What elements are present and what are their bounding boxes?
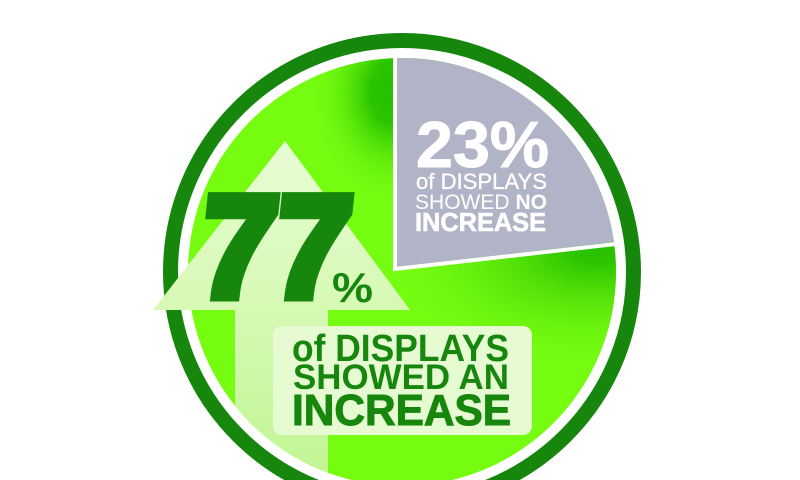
- grey slice label: 23 percent of displays showed no increase: 23%: [416, 108, 549, 181]
- callout: of displays showed an increase: of DISPLAYS: [292, 328, 509, 370]
- pie chart infographic: [153, 33, 641, 480]
- grey slice label: 23 percent of displays showed no increase: [415, 108, 549, 237]
- big value: 77 percent: %: [332, 264, 373, 311]
- pie slice: 77 percent green: [180, 50, 630, 480]
- big value: 77 percent: 77: [193, 167, 358, 327]
- grey slice label: 23 percent of displays showed no increase: INCREASE: [415, 207, 546, 237]
- grey slice label: 23 percent of displays showed no increase: SHOWED NO: [415, 191, 547, 214]
- callout: of displays showed an increase: INCREASE: [292, 386, 511, 435]
- pie slice: 23 percent grey: [395, 50, 625, 269]
- grey slice label: 23 percent of displays showed no increase: of DISPLAYS: [416, 169, 547, 194]
- arrow pointing up: [153, 141, 410, 480]
- outer green ring: [170, 40, 634, 480]
- callout: of displays showed an increase: SHOWED AN: [293, 358, 509, 397]
- callout: of displays showed an increase: [273, 326, 532, 435]
